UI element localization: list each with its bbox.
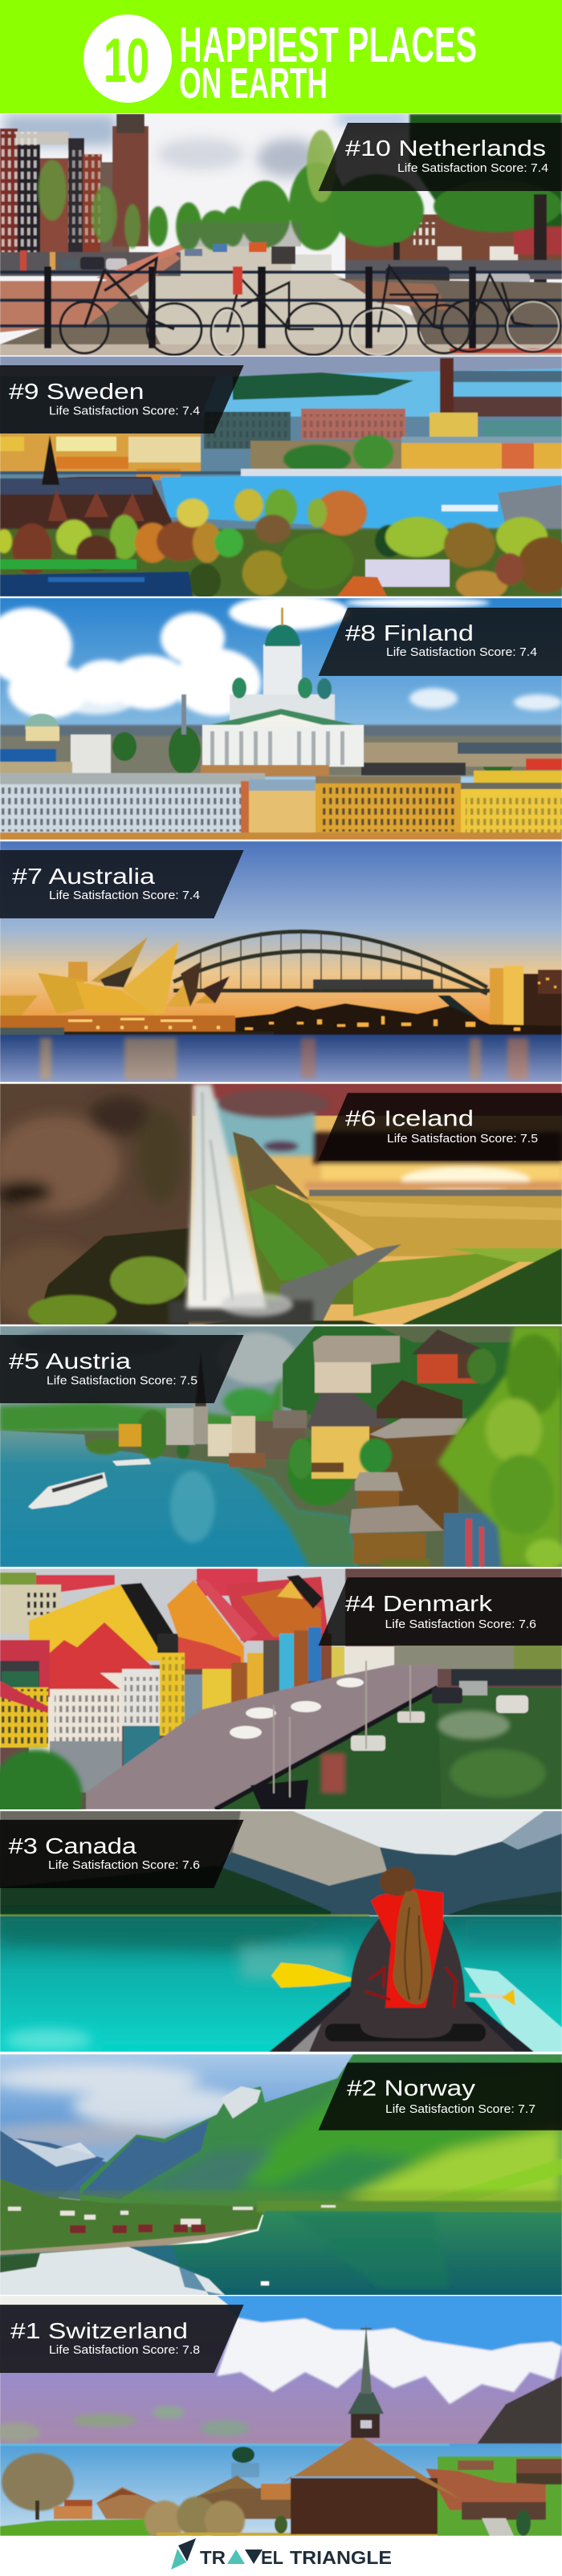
panel: Switzerland (0, 2296, 562, 2536)
panel: Iceland (0, 1084, 562, 1325)
label: #3 Canada: Life Satisfaction Score: 7.6 (48, 1859, 200, 1872)
label: #7 Australia: Life Satisfaction Score: 7.4 (49, 889, 200, 902)
label: #4 Denmark: #4 Denmark (345, 1591, 493, 1616)
label: #9 Sweden (0, 365, 244, 433)
label: #8 Finland: Life Satisfaction Score: 7.4 (386, 646, 537, 659)
label: #4 Denmark: Life Satisfaction Score: 7.6 (385, 1618, 536, 1631)
panel: Netherlands (0, 114, 562, 356)
photo: Nyhavn model (0, 1569, 562, 1846)
label: #1 Switzerland: Life Satisfaction Score: 7.8 (49, 2344, 200, 2357)
photo: Helsinki cathedral (0, 595, 562, 840)
header banner (0, 0, 562, 113)
wordmark (200, 2547, 392, 2568)
number badge: 10 (104, 25, 149, 96)
photo: Stockholm (0, 356, 562, 600)
photo: Canadian lake and canoe (0, 1811, 562, 2052)
label: #9 Sweden: #9 Sweden (9, 379, 145, 404)
panel: Norway (0, 2054, 562, 2295)
photo: Hallstatt (0, 1326, 562, 1571)
label: #2 Norway: Life Satisfaction Score: 7.7 (385, 2103, 536, 2116)
label: #8 Finland: #8 Finland (345, 621, 474, 645)
photo: Icelandic waterfall (0, 1084, 562, 1330)
number badge (83, 14, 172, 103)
panel: Canada (0, 1811, 562, 2052)
label: #2 Norway (318, 2063, 562, 2130)
panel: Sweden (0, 356, 562, 596)
footer logo: Travel Triangle (171, 2538, 392, 2570)
photo: Amsterdam canal (0, 114, 562, 356)
label: #9 Sweden: Life Satisfaction Score: 7.4 (49, 405, 200, 417)
title: ON EARTH (179, 59, 328, 108)
photo: Sydney harbour (0, 841, 562, 1082)
label: #8 Finland (318, 608, 562, 676)
panel: Australia (0, 841, 562, 1082)
label: #4 Denmark (318, 1577, 562, 1646)
label: #6 Iceland (318, 1093, 562, 1161)
label: #1 Switzerland (0, 2305, 244, 2373)
label: #3 Canada: #3 Canada (9, 1833, 136, 1858)
label: #5 Austria: #5 Austria (9, 1349, 132, 1373)
panel: Finland (0, 598, 562, 840)
label: #10 Netherlands: Life Satisfaction Score: 7.4 (397, 162, 548, 175)
label: #10 Netherlands: #10 Netherlands (345, 136, 546, 161)
label: #1 Switzerland: #1 Switzerland (10, 2318, 188, 2343)
panel: Austria (0, 1326, 562, 1567)
wordmark: TR (200, 2547, 226, 2568)
label: #10 Netherlands (318, 123, 562, 191)
label: #6 Iceland: Life Satisfaction Score: 7.5 (387, 1133, 538, 1146)
wordmark: EL (261, 2547, 283, 2568)
label: #7 Australia: #7 Australia (12, 864, 156, 889)
bicycles (60, 258, 560, 356)
label: #6 Iceland: #6 Iceland (345, 1106, 474, 1131)
label: #2 Norway: #2 Norway (347, 2076, 475, 2101)
label: #5 Austria (0, 1335, 244, 1403)
panel: Denmark (0, 1569, 562, 1809)
photo: Swiss lake and church (0, 2296, 562, 2541)
wordmark: TRIANGLE (290, 2547, 392, 2568)
title (179, 18, 477, 108)
label: #3 Canada (0, 1820, 244, 1888)
label: #7 Australia (0, 850, 244, 918)
photo: Norwegian fjord (0, 2054, 562, 2295)
label: #5 Austria: Life Satisfaction Score: 7.5 (47, 1375, 198, 1388)
logo mark (171, 2538, 196, 2570)
